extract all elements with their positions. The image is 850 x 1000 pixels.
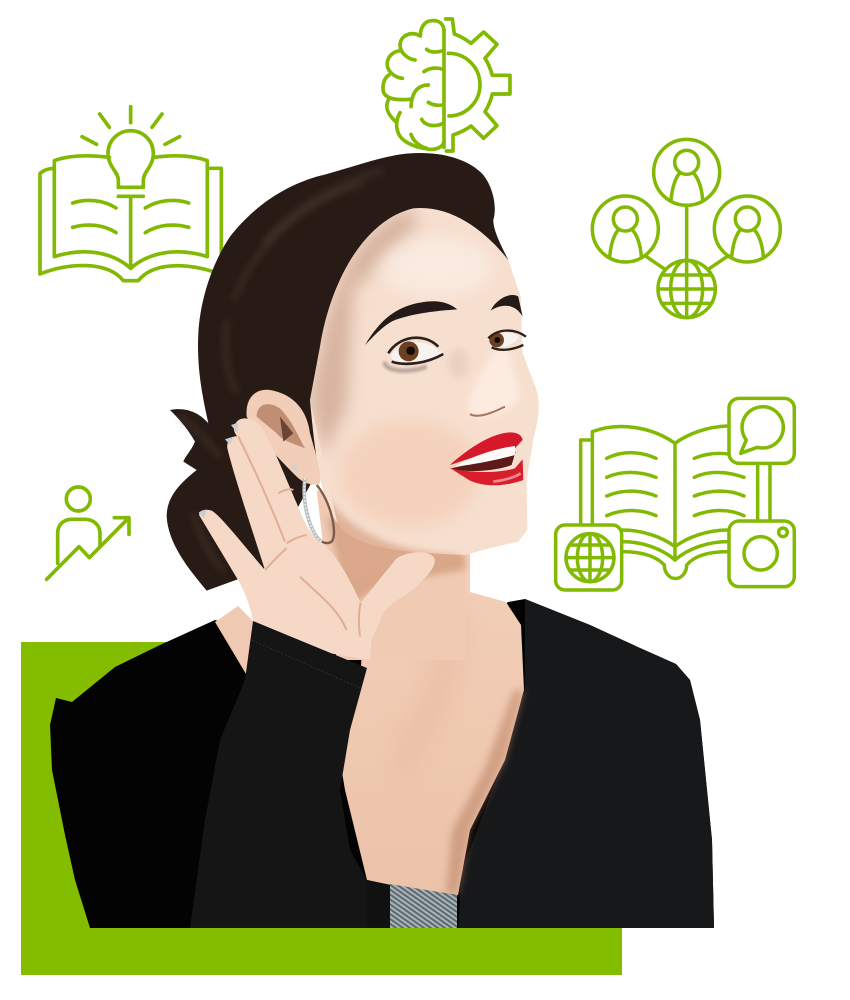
jacket right panel shading (458, 599, 714, 928)
left eye (385, 338, 443, 371)
hoop earring (304, 478, 334, 543)
icon: network of people around a globe (592, 139, 780, 318)
neck shadow (327, 517, 465, 607)
green backdrop block (21, 642, 622, 975)
nose (468, 340, 520, 417)
neck and chest skin (340, 540, 524, 895)
neck skin left (215, 606, 262, 674)
jacket body (50, 599, 714, 928)
cheek warmth (340, 420, 480, 527)
inner top (367, 880, 391, 928)
head, hair and hand (167, 153, 539, 660)
nails (199, 423, 238, 518)
ear (246, 390, 320, 485)
right eye (488, 331, 526, 350)
hair (167, 153, 508, 591)
striped shirt (390, 884, 457, 928)
left sleeve (190, 621, 367, 928)
icon: person with rising arrow (47, 487, 129, 579)
chest edge shadow (446, 690, 524, 895)
forehead light (380, 237, 493, 297)
hand (199, 418, 435, 660)
icon: open book with light bulb (40, 107, 221, 281)
neck under jaw (317, 490, 465, 660)
lips (449, 432, 523, 485)
temple shadow (310, 208, 417, 457)
lower jaw shadow (332, 498, 460, 554)
eye socket grey (450, 350, 468, 376)
hair highlights (180, 170, 383, 570)
collar bone shading (395, 610, 470, 790)
icon: half brain half gear (383, 19, 510, 151)
cuff stitching (252, 640, 360, 688)
photo: woman cupping her ear (50, 153, 714, 928)
face (310, 208, 539, 555)
eyebrows (365, 301, 457, 345)
hand creases (238, 437, 361, 637)
face shading (310, 208, 493, 580)
icon: book with social media tiles (556, 398, 794, 590)
